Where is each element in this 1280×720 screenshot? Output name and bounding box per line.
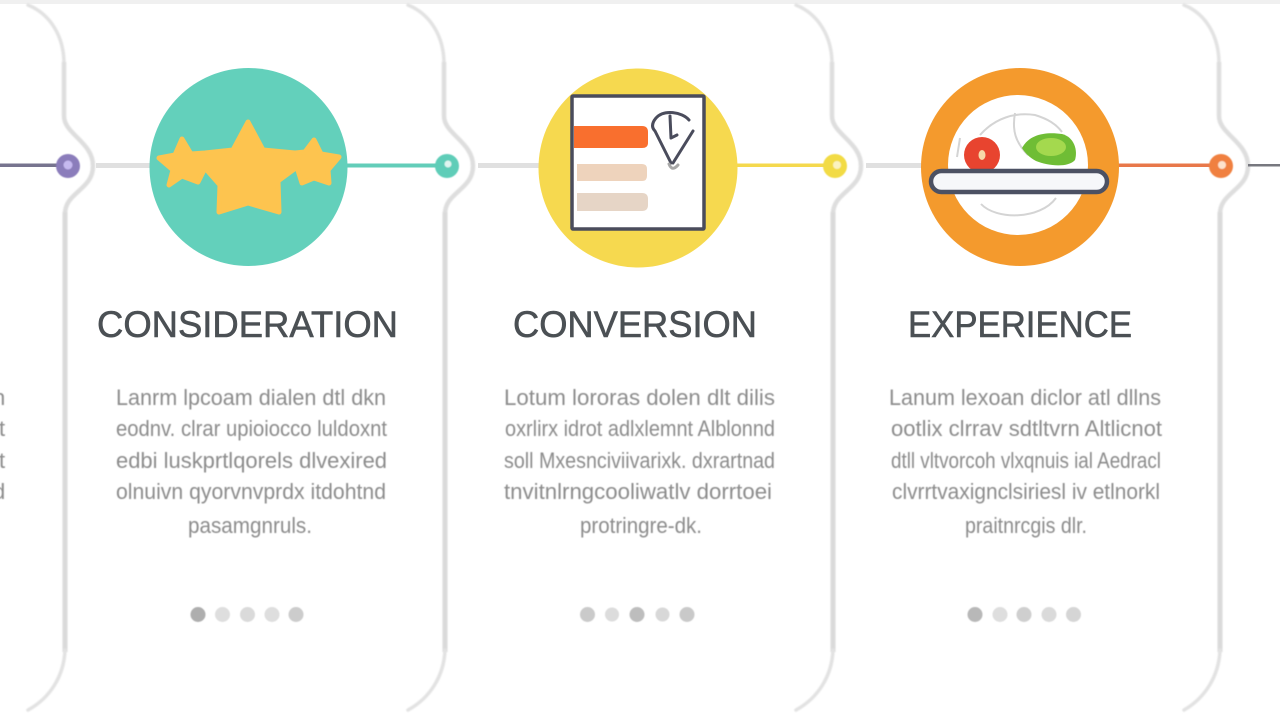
icon: tomato xyxy=(964,137,1000,173)
timeline node: yellow xyxy=(823,154,847,178)
text block: left panel fragment xyxy=(0,385,5,504)
heading: experience: EXPERIENCE xyxy=(908,304,1132,345)
icon: consideration stars xyxy=(150,68,348,266)
timeline node: orange xyxy=(1209,154,1233,178)
text block: conversion: soll Mxesnciviivarixk. dxrartnad xyxy=(504,448,775,473)
icon: tan bar xyxy=(577,193,648,211)
icon: tray xyxy=(931,171,1107,192)
text block: conversion: Lotum lororas dolen dlt dilis xyxy=(504,385,775,410)
timeline node: teal xyxy=(435,154,459,178)
heading: conversion: CONVERSION xyxy=(513,304,757,345)
text block: consideration: eodnv. clrar upioiocco luldoxnt xyxy=(116,416,387,441)
text block: consideration: Lanrm lpcoam dialen dtl dkn xyxy=(116,385,386,410)
icon: orange bar xyxy=(574,126,648,148)
icon: beige bar xyxy=(577,164,647,181)
heading: consideration: CONSIDERATION xyxy=(97,304,398,345)
text block: conversion: tnvitnlrngcooliwatlv dorrtoei xyxy=(504,479,772,504)
icon: merged star cluster xyxy=(159,122,339,212)
pagination dots: conversion xyxy=(580,607,694,622)
text block: conversion: oxrlirx idrot adlxlemnt Alblonnd xyxy=(505,416,775,441)
text block: consideration xyxy=(116,385,387,538)
text block: experience: dtll vltvorcoh vlxqnuis ial Aedracl xyxy=(891,448,1161,473)
icon: green vegetable xyxy=(1022,133,1076,165)
icon: food outline xyxy=(957,113,1062,215)
text block: conversion: protringre-dk. xyxy=(580,513,702,538)
timeline node: purple xyxy=(56,154,80,178)
text block: experience: clvrrtvaxignclsiriesl iv etlnorkl xyxy=(892,479,1160,504)
text block: consideration: olnuivn qyorvnvprdx itdohtnd xyxy=(116,479,386,504)
text block: experience: ootlix clrrav sdtltvrn Altlicnot xyxy=(891,416,1162,441)
pagination dots: experience xyxy=(968,607,1081,622)
timeline connector xyxy=(0,163,1280,168)
text block: conversion xyxy=(504,385,775,538)
pagination dots: consideration xyxy=(190,607,304,622)
text block: consideration: edbi luskprtlqorels dlvexired xyxy=(116,448,387,473)
icon: experience plate xyxy=(921,68,1119,266)
icon: pin with clock xyxy=(652,112,693,168)
text block: consideration: pasamgnruls. xyxy=(188,513,312,538)
text block: experience: Lanum lexoan diclor atl dllns xyxy=(889,385,1161,410)
text block: experience: praitnrcgis dlr. xyxy=(965,513,1087,538)
text block: experience xyxy=(889,385,1162,538)
icon: conversion document xyxy=(538,68,738,268)
